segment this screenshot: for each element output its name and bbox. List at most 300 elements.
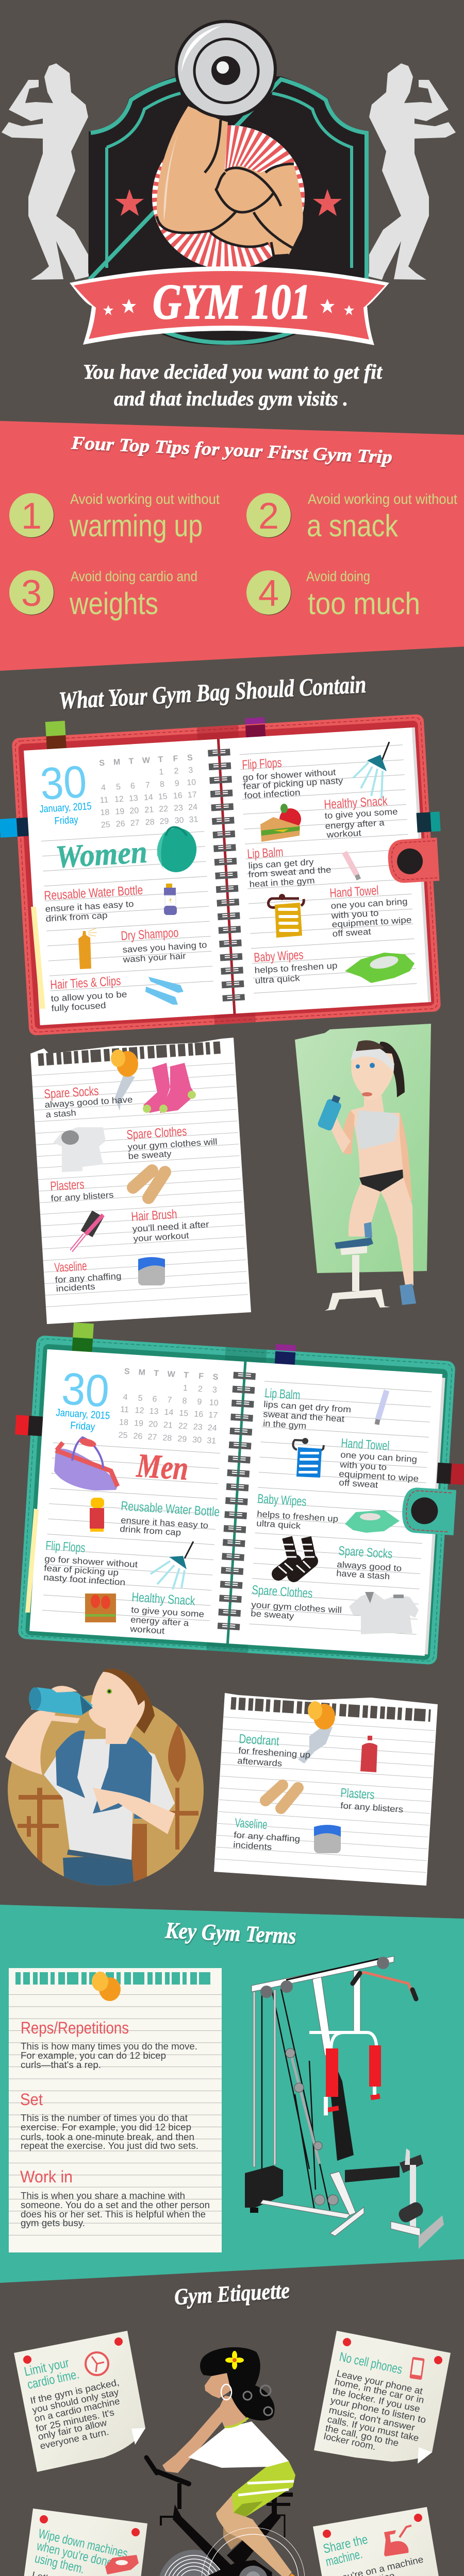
note: limit cardio xyxy=(14,2331,145,2472)
ruled lines xyxy=(133,1069,147,1303)
intro text xyxy=(83,360,383,410)
calendar grid: S xyxy=(124,1367,130,1376)
calendar grid: 26 xyxy=(133,1432,143,1441)
calendar grid: 4 xyxy=(123,1393,128,1402)
panel: key terms note xyxy=(9,1968,222,2252)
item: healthy snack: energy after a xyxy=(325,818,385,831)
icon: badge star left xyxy=(115,189,144,216)
item: plasters xyxy=(50,1171,165,1204)
term: work in: Work in xyxy=(20,2167,73,2186)
calendar date: 30 xyxy=(39,756,88,809)
icon: teal bag xyxy=(154,825,200,875)
calendar grid: 24 xyxy=(207,1423,217,1433)
note: share the machine: Share the xyxy=(322,2532,369,2556)
pec deck arms xyxy=(309,2032,376,2050)
calendar grid: F xyxy=(173,754,178,764)
calendar grid: 19 xyxy=(134,1419,144,1428)
item: spare socks: have a stash xyxy=(336,1568,390,1582)
item: reusable water bottle: ensure it has easy to xyxy=(45,899,134,914)
item: plasters: for any blisters xyxy=(340,1801,404,1815)
tip 1: Avoid working out without xyxy=(70,491,220,507)
item: vaseline: for any chaffing xyxy=(234,1830,301,1844)
calendar grid: 20 xyxy=(148,1420,158,1429)
calendar grid: 5 xyxy=(138,1394,143,1403)
item: plasters: Plasters xyxy=(340,1786,375,1802)
calendar grid: 9 xyxy=(174,779,179,788)
title ribbon xyxy=(70,266,389,345)
item: hand towel: equipment to wipe xyxy=(339,1469,419,1484)
item: spare socks xyxy=(44,1063,196,1120)
item: hand towel: one you can bring xyxy=(330,896,408,911)
item: reusable water bottle: Reusable Water Bottle xyxy=(121,1499,220,1519)
note: no cell phones: calls. If you must take xyxy=(326,2414,420,2444)
item: vaseline: for any chaffing xyxy=(55,1271,122,1285)
calendar grid: 15 xyxy=(179,1409,189,1418)
earring xyxy=(221,2384,231,2400)
lat pull bar xyxy=(353,1972,416,1999)
calendar grid: 21 xyxy=(144,805,154,815)
heading: gym etiquette: Gym Etiquette xyxy=(174,2278,290,2310)
calendar grid: 22 xyxy=(178,1421,188,1431)
calendar grid: W xyxy=(167,1370,176,1379)
icon: push pin xyxy=(298,1701,335,1764)
illustration: woman figure xyxy=(317,1040,416,1305)
water bottle xyxy=(29,1686,93,1723)
item: vaseline: incidents xyxy=(233,1840,272,1852)
struts xyxy=(312,1971,360,2056)
item: healthy snack: Healthy Snack xyxy=(131,1590,196,1608)
note: limit cardio: you should only stay xyxy=(31,2387,120,2415)
calendar grid: 26 xyxy=(115,820,125,829)
ribbon stars xyxy=(103,299,354,315)
item: hand towel: one you can bring xyxy=(340,1450,418,1464)
head and hair xyxy=(200,2347,275,2420)
tip 3: 3 xyxy=(21,573,42,614)
item: flip flops: fear of picking up xyxy=(44,1563,119,1578)
note: no cell phones: the call, go to the xyxy=(324,2422,400,2448)
leg xyxy=(216,2495,299,2576)
item: hand towel: with you to xyxy=(339,1460,387,1472)
item: hair ties and clips: fully focused xyxy=(51,1001,106,1013)
item: hand towel: off sweat xyxy=(332,927,371,939)
item: plasters: Plasters xyxy=(50,1177,85,1194)
calendar grid: 5 xyxy=(116,783,121,791)
calendar grid: 30 xyxy=(174,816,184,825)
tip 3: Avoid doing cardio and xyxy=(71,568,197,584)
term: reps: curls—that's a rep. xyxy=(21,2060,101,2070)
item: deodorant: afterwards xyxy=(237,1756,283,1769)
item: healthy snack: energy after a xyxy=(130,1615,189,1628)
item: flip flops: Flip Flops xyxy=(242,755,282,772)
item: lip balm: Lip Balm xyxy=(264,1386,301,1402)
head xyxy=(89,1669,155,1744)
calendar grid: 14 xyxy=(143,793,153,802)
icon: right bodybuilder silhouette xyxy=(367,63,456,280)
notebook clasp xyxy=(387,838,439,884)
item: lip balm xyxy=(263,1386,387,1431)
note: limit cardio: everyone a turn. xyxy=(39,2427,110,2451)
calendar grid: 31 xyxy=(207,1436,217,1446)
term: set: curls, took a one-minute break, and then xyxy=(21,2132,194,2142)
seat xyxy=(345,2148,423,2230)
item: flip flops: Flip Flops xyxy=(45,1538,86,1555)
item: healthy snack xyxy=(260,794,398,842)
note: limit cardio: for 25 minutes. It's xyxy=(35,2407,115,2434)
tip 4 xyxy=(246,568,420,621)
tip 3 xyxy=(9,568,197,621)
item: healthy snack: workout xyxy=(326,828,361,840)
tip 1 xyxy=(9,491,220,543)
note: no cell phones: the locker. If you use xyxy=(332,2385,421,2414)
calendar grid: S xyxy=(187,754,193,762)
item: spare socks: Spare Socks xyxy=(44,1084,99,1101)
torso xyxy=(162,2396,289,2473)
notebook cover and pages xyxy=(0,699,451,1037)
item: spare socks: Spare Socks xyxy=(338,1544,393,1562)
item: lip balm: in the gym xyxy=(263,1418,307,1431)
notebook cover and pages xyxy=(2,1319,464,1666)
note: no cell phones: home, in the car or in xyxy=(334,2376,425,2405)
tip 4: 4 xyxy=(258,573,279,614)
item: spare clothes: your gym clothes will xyxy=(127,1137,218,1152)
item: flip flops: fear of picking up nasty xyxy=(243,775,343,791)
panel: torn note, men xyxy=(214,1693,438,1886)
calendar grid: 29 xyxy=(159,817,169,826)
icon: push pin xyxy=(111,1049,138,1111)
note: limit cardio: only fair to allow xyxy=(37,2417,108,2442)
weight stack xyxy=(245,2165,283,2213)
term: set xyxy=(20,2090,198,2151)
item: baby wipes: helps to freshen up xyxy=(254,960,338,975)
item: plasters: for any blisters xyxy=(51,1190,114,1204)
intro text: You have decided you want to get fit xyxy=(83,360,383,383)
panel: woman with bottle on green paper xyxy=(295,1024,431,1311)
item: lip balm: lips can get dry from xyxy=(263,1399,352,1415)
calendar grid xyxy=(118,1367,220,1446)
item: spare socks: always good to xyxy=(337,1560,402,1573)
item: hair brush xyxy=(71,1207,209,1251)
item: lip balm: Lip Balm xyxy=(247,845,284,861)
heading: key gym terms: Key Gym Terms xyxy=(164,1918,297,1949)
item: reusable water bottle: drink from cap xyxy=(120,1524,181,1537)
flywheel xyxy=(158,2550,230,2576)
cables xyxy=(262,1989,330,2210)
heading: women: Women xyxy=(55,835,148,875)
calendar grid: T xyxy=(158,755,163,765)
calendar grid: 7 xyxy=(167,1396,172,1405)
calendar grid: 27 xyxy=(147,1433,157,1442)
term: reps: For example, you can do 12 bicep xyxy=(21,2050,166,2061)
note: no cell phones: locker room. xyxy=(323,2431,377,2452)
item: reusable water bottle: Reusable Water Bottle xyxy=(44,883,143,903)
note: share the machine xyxy=(313,2507,443,2576)
badge shield xyxy=(89,76,369,345)
calendar grid: 12 xyxy=(114,795,124,804)
backrest pad xyxy=(330,2063,354,2161)
calendar grid: 24 xyxy=(188,803,198,812)
note: wipe down machines: Wipe down machines xyxy=(37,2527,129,2561)
item: hair ties and clips xyxy=(50,974,184,1013)
term: work in: someone. You do a set and the other person xyxy=(21,2200,210,2210)
calendar grid: 8 xyxy=(159,780,164,789)
notebook clasp xyxy=(401,1487,456,1535)
item: spare clothes: be sweaty xyxy=(251,1608,294,1621)
calendar grid: 25 xyxy=(118,1431,128,1440)
item: flip flops xyxy=(43,1538,193,1589)
item: lip balm: heat in the gym xyxy=(249,875,315,889)
icon: weight plate xyxy=(176,22,275,117)
calendar grid: 20 xyxy=(129,806,139,816)
bike frame xyxy=(139,2458,323,2576)
item: hand towel: equipment to wipe xyxy=(332,915,412,929)
icon: purple gym bag xyxy=(54,1437,119,1490)
item: vaseline: Vaseline xyxy=(54,1259,87,1275)
shorts xyxy=(232,2461,295,2517)
sticky note edge xyxy=(25,1509,39,1613)
term: work in xyxy=(20,2167,210,2228)
note: limit cardio: Limit your xyxy=(23,2355,70,2379)
calendar grid: 1 xyxy=(183,1384,188,1393)
tip 4: Avoid doing xyxy=(306,568,370,584)
item: reusable water bottle: drink from cap xyxy=(45,910,108,924)
flower xyxy=(225,2351,244,2369)
term: set: Set xyxy=(20,2090,43,2109)
item: dry shampoo: saves you having to xyxy=(122,940,207,955)
item: reusable water bottle: ensure it has easy to xyxy=(121,1515,209,1531)
tip 3: weights xyxy=(69,586,158,621)
calendar grid: T xyxy=(154,1369,159,1378)
calendar grid: 4 xyxy=(101,784,106,792)
note: wipe down machines: when you're done xyxy=(35,2538,114,2570)
panel: women's notebook xyxy=(0,699,451,1037)
calendar grid: 28 xyxy=(162,1434,172,1443)
calendar grid: 31 xyxy=(189,815,198,824)
calendar grid: 2 xyxy=(197,1385,203,1394)
item: spare clothes: your gym clothes will xyxy=(251,1600,342,1615)
calendar grid: 3 xyxy=(188,766,193,775)
calendar grid: 23 xyxy=(193,1422,203,1432)
item: plasters xyxy=(266,1785,404,1815)
tip 2: a snack xyxy=(307,509,399,543)
calendar date: January, 2015 xyxy=(56,1407,110,1422)
calendar grid: 30 xyxy=(192,1435,202,1445)
calendar grid: W xyxy=(142,756,151,765)
calendar grid: 13 xyxy=(129,794,138,803)
calendar grid: 22 xyxy=(159,805,169,814)
item: spare clothes: Spare Clothes xyxy=(126,1124,187,1142)
calendar grid: 21 xyxy=(163,1421,173,1430)
calendar grid: 18 xyxy=(119,1418,129,1427)
item: vaseline: Vaseline xyxy=(235,1816,268,1832)
calendar grid: 6 xyxy=(130,782,136,791)
icon: sponge xyxy=(105,2555,139,2574)
sticky note edge xyxy=(31,907,45,1009)
note: no cell phones: Leave your phone at xyxy=(336,2368,424,2396)
calendar grid xyxy=(97,753,198,829)
tip 2 xyxy=(246,491,457,543)
item: healthy snack: to give you some xyxy=(324,807,398,821)
item: vaseline xyxy=(54,1257,165,1294)
calendar date: Friday xyxy=(54,814,78,827)
calendar grid: 3 xyxy=(212,1385,217,1395)
item: dry shampoo: wash your hair xyxy=(122,951,186,964)
icon: clock xyxy=(86,2352,108,2375)
item: hair brush: Hair Brush xyxy=(131,1207,177,1224)
item: deodorant: Deodrant xyxy=(239,1732,279,1749)
calendar date xyxy=(56,1363,111,1433)
item: hand towel: off sweat xyxy=(339,1478,378,1490)
calendar grid: 15 xyxy=(158,792,168,802)
calendar grid: 16 xyxy=(173,791,183,801)
calendar grid: 1 xyxy=(159,768,164,776)
note: wipe down machines xyxy=(17,2509,147,2576)
item: healthy snack: Healthy Snack xyxy=(324,794,388,812)
item: spare clothes xyxy=(53,1124,218,1172)
calendar grid: T xyxy=(128,757,134,766)
icon: push pin xyxy=(92,1972,121,2001)
item: spare clothes: be sweaty xyxy=(128,1149,172,1161)
item: hair ties and clips: Hair Ties & Clips xyxy=(50,974,121,992)
gym equipment silhouettes xyxy=(18,1723,198,1886)
title text: GYM 101 xyxy=(153,274,311,329)
term: set: repeat the exercise. You just did two sets. xyxy=(21,2141,198,2151)
item: healthy snack: to give you some xyxy=(131,1605,205,1619)
base roller xyxy=(396,2200,444,2249)
term: work in: does his or her set. This is helpful when the xyxy=(21,2209,206,2219)
item: dry shampoo xyxy=(78,925,207,969)
item: hand towel: Hand Towel xyxy=(341,1436,390,1453)
note: limit cardio: cardio time. xyxy=(26,2367,80,2392)
note: no cell phones xyxy=(314,2331,451,2464)
item: spare socks: always good to have xyxy=(44,1095,133,1110)
calendar date: Friday xyxy=(70,1420,95,1433)
calendar grid: 16 xyxy=(194,1410,204,1419)
item: spare clothes xyxy=(251,1583,419,1634)
item: hair ties and clips: to allow you to be xyxy=(51,989,127,1004)
note: share the machine: machine. xyxy=(324,2547,364,2569)
panel: men's notebook xyxy=(2,1319,464,1666)
note: no cell phones: music, don't answer xyxy=(328,2404,416,2433)
calendar grid: 23 xyxy=(174,804,184,813)
calendar grid: 29 xyxy=(177,1434,187,1444)
item: baby wipes: ultra quick xyxy=(255,973,301,986)
note: no cell phones: No cell phones xyxy=(338,2349,404,2377)
calendar grid: M xyxy=(138,1368,145,1377)
calendar grid: 7 xyxy=(145,781,150,790)
item: lip balm xyxy=(247,845,359,889)
calendar grid: T xyxy=(184,1371,189,1380)
item: dry shampoo: Dry Shampoo xyxy=(121,925,179,943)
term: set: This is the number of times you do that xyxy=(21,2113,188,2123)
illustration: stool xyxy=(325,1238,390,1311)
calendar grid: 11 xyxy=(120,1405,129,1414)
calendar grid: 9 xyxy=(197,1398,202,1406)
calendar grid: 27 xyxy=(130,819,140,828)
term: set: exercise. For example, you did 12 bicep xyxy=(21,2122,191,2132)
item: healthy snack xyxy=(85,1590,205,1636)
columns xyxy=(253,1990,276,2167)
item: hand towel xyxy=(268,883,412,939)
calendar grid: 17 xyxy=(208,1411,218,1420)
item: lip balm: sweat and the heat xyxy=(263,1409,345,1424)
item: spare socks: a stash xyxy=(45,1108,76,1120)
illustration: multi gym machine xyxy=(245,1956,444,2249)
icon: exercise bike xyxy=(384,2526,411,2556)
top beam xyxy=(252,1956,394,1998)
calendar grid: S xyxy=(99,759,105,768)
item: baby wipes: helps to freshen up xyxy=(257,1509,339,1524)
term: work in: This is when you share a machine with xyxy=(21,2191,185,2201)
tip 1: warming up xyxy=(69,509,203,543)
calendar grid: 25 xyxy=(101,820,110,829)
item: baby wipes: Baby Wipes xyxy=(257,1492,307,1509)
tip 2: 2 xyxy=(258,496,279,537)
item: flip flops: nasty foot infection xyxy=(43,1572,126,1587)
term: reps: This is how many times you do the move. xyxy=(21,2041,197,2052)
calendar grid: M xyxy=(113,758,121,767)
illustration: woman on exercise bike xyxy=(139,2347,323,2576)
item: baby wipes xyxy=(256,1492,400,1533)
calendar date: 30 xyxy=(60,1363,111,1417)
calendar grid: 12 xyxy=(135,1406,144,1415)
calendar grid: F xyxy=(198,1372,204,1381)
illustration: man drinking in gold circle xyxy=(5,1669,204,1888)
calendar grid: S xyxy=(212,1372,219,1382)
item: reusable water bottle xyxy=(44,883,177,924)
calendar grid: 18 xyxy=(100,808,110,817)
item: lip balm: from sweat and the xyxy=(248,865,332,879)
calendar grid: 6 xyxy=(152,1395,157,1404)
item: deodorant xyxy=(237,1732,377,1772)
red arm pads xyxy=(326,2045,381,2112)
item: spare clothes: Spare Clothes xyxy=(252,1583,313,1601)
item: spare socks xyxy=(278,1537,402,1582)
calendar grid: 19 xyxy=(115,807,125,817)
pulley arm xyxy=(286,2048,338,2205)
item: flip flops xyxy=(242,742,389,801)
item: hand towel: with you to xyxy=(330,908,379,921)
item: deodorant: for freshening up xyxy=(238,1745,311,1760)
tip 4: too much xyxy=(308,586,420,621)
sunburst oval xyxy=(150,124,309,273)
header emblem xyxy=(2,22,456,345)
item: baby wipes: ultra quick xyxy=(256,1518,301,1531)
item: flip flops: foot infection xyxy=(244,788,301,801)
calendar grid: 17 xyxy=(187,790,197,800)
item: vaseline xyxy=(233,1816,341,1853)
base frame xyxy=(260,2172,420,2236)
item: hand towel: Hand Towel xyxy=(329,883,379,901)
heading: gym bag: What Your Gym Bag Should Contain xyxy=(58,671,367,715)
item: baby wipes xyxy=(254,947,415,986)
note: no cell phones: your phone to listen to xyxy=(329,2395,427,2425)
icon: left bodybuilder silhouette xyxy=(2,63,90,280)
item: healthy snack: workout xyxy=(129,1624,165,1636)
item: vaseline: incidents xyxy=(56,1281,95,1294)
calendar grid: 10 xyxy=(209,1398,219,1408)
item: baby wipes: Baby Wipes xyxy=(254,947,304,965)
term: reps xyxy=(21,2019,197,2070)
intro text: and that includes gym visits . xyxy=(114,387,348,410)
icon: phone xyxy=(409,2357,425,2380)
note: limit cardio: on a cardio machine xyxy=(34,2396,121,2424)
note: limit cardio: If the gym is packed, xyxy=(29,2377,120,2406)
item: flip flops: go for shower without xyxy=(44,1554,138,1569)
crank and disc xyxy=(202,2528,305,2576)
item: hair brush: your workout xyxy=(133,1230,189,1244)
calendar grid: 11 xyxy=(100,795,109,805)
calendar grid: 8 xyxy=(182,1397,187,1405)
